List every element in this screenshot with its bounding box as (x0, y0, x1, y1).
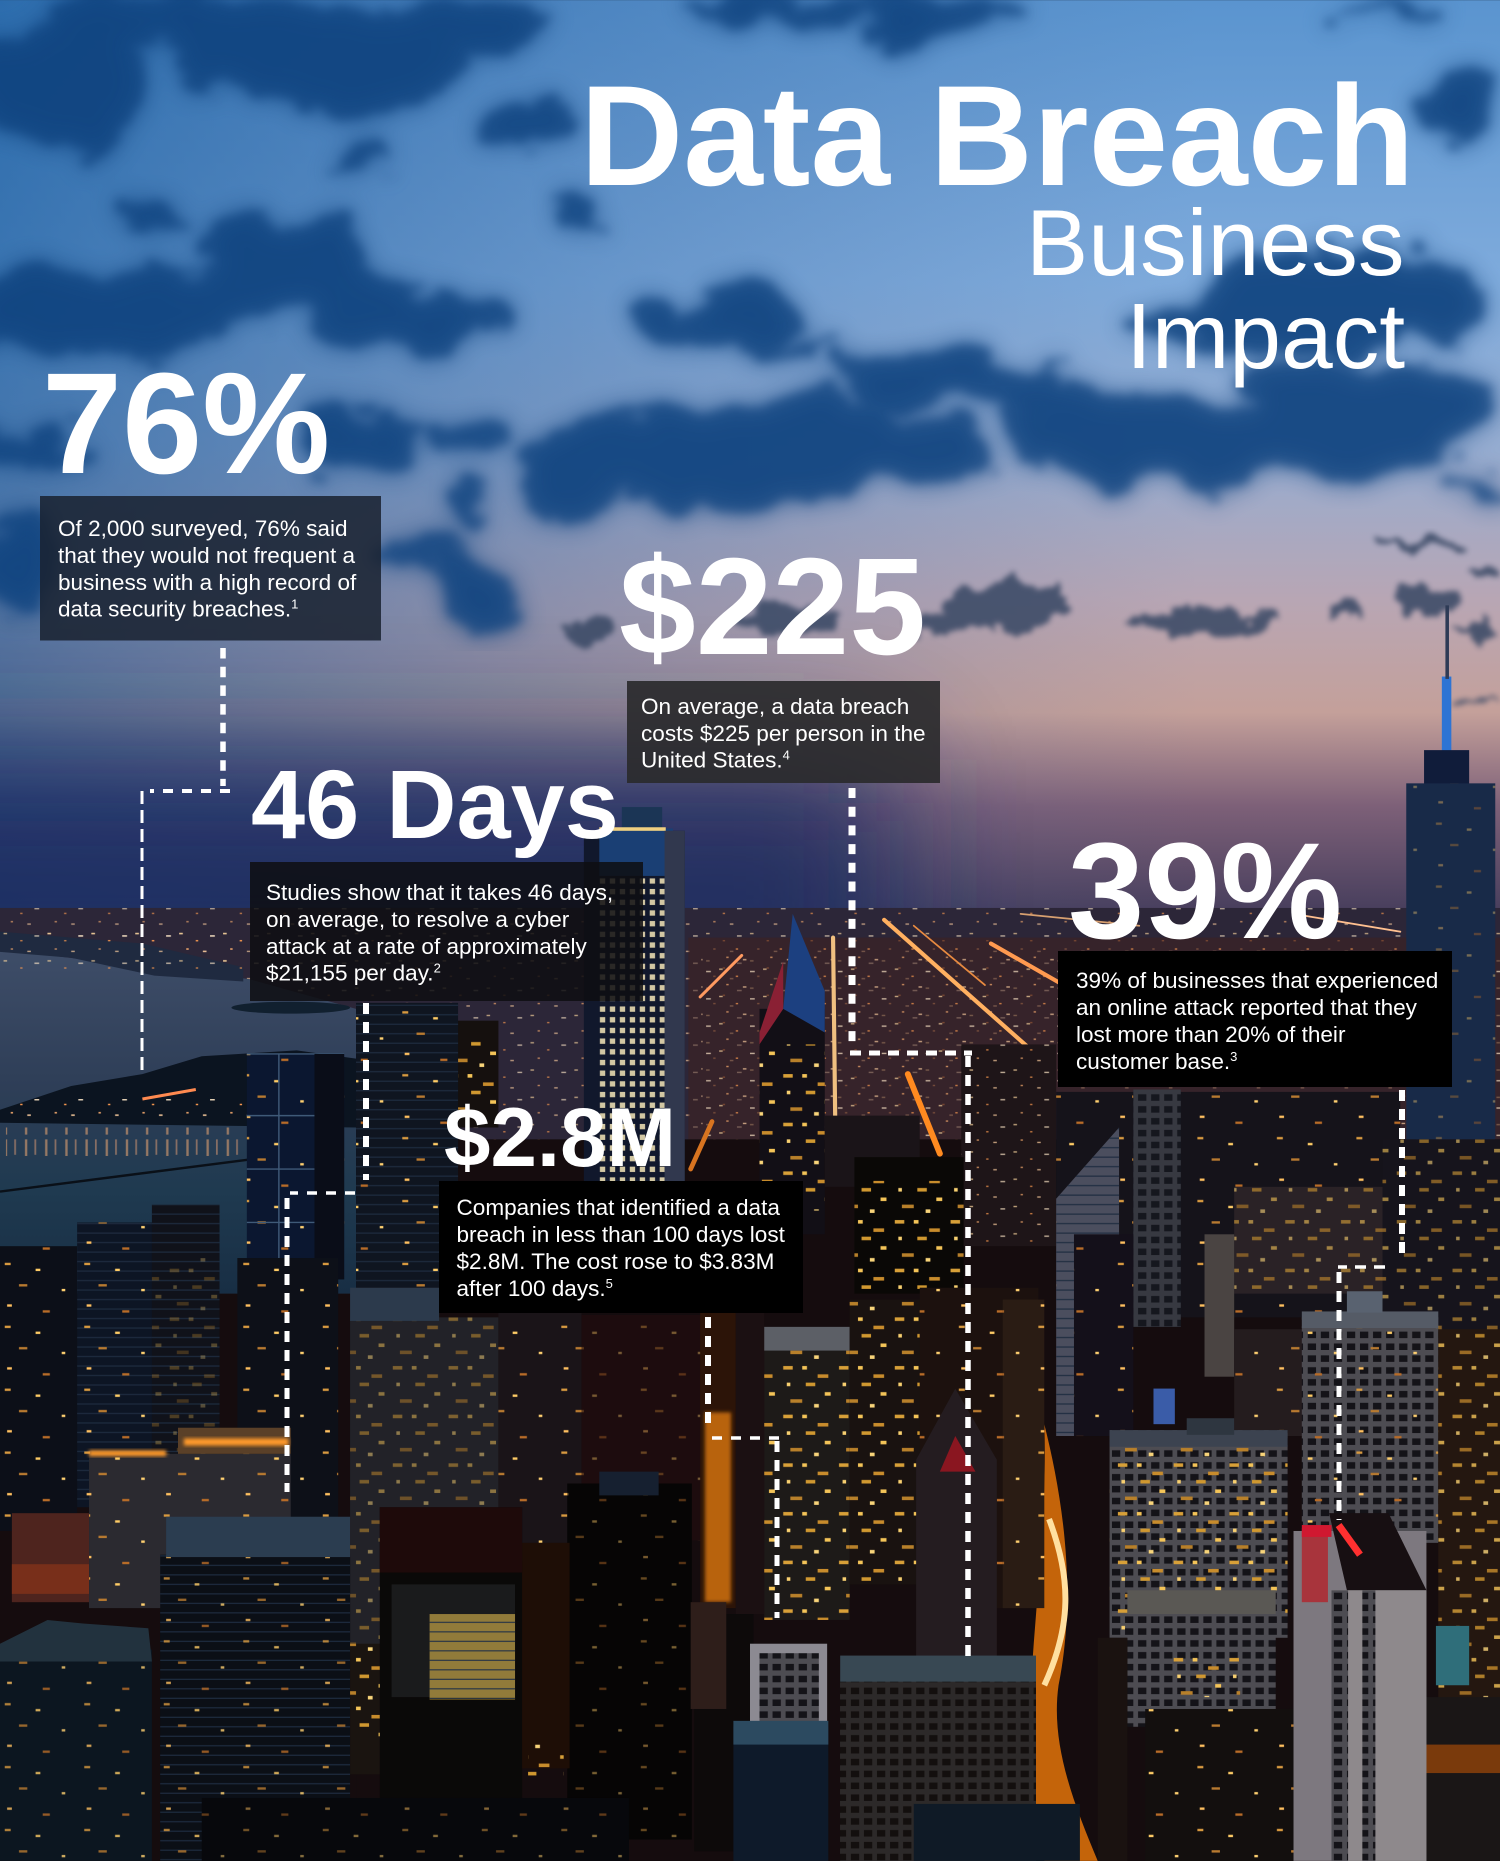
stat: $225 (619, 530, 940, 783)
text: $225 description: United States. (641, 748, 783, 772)
stat: 46 Days (250, 750, 643, 1001)
text: 46 Days description: Studies show that it takes 46 days, (266, 880, 613, 905)
text: 39% description: an online attack reported that they (1076, 995, 1418, 1020)
building: square office below (1127, 1590, 1276, 1727)
building: windowed office (1110, 1418, 1288, 1638)
building: red and blue crown tower (759, 914, 825, 1234)
text: 76% description: data security breaches. (58, 596, 291, 622)
text: 76% description: Of 2,000 surveyed, 76% said (58, 516, 348, 541)
building: left blue tower (247, 1054, 344, 1279)
lower-left buildings (0, 1205, 338, 1608)
connector: $2.8M dashed line (708, 1317, 780, 1618)
text: $225 description: costs $225 per person in the (641, 721, 926, 746)
number: 39%: 39% (1068, 815, 1342, 968)
text: 46 Days description: attack at a rate of approximately (266, 934, 588, 959)
text: $225 description: On average, a data breach (641, 694, 909, 719)
lake water (0, 932, 356, 1294)
text: 46 Days description: 2 (434, 960, 441, 976)
low clouds at sunset (566, 537, 1500, 704)
panel: 46 Days description (250, 862, 643, 1001)
text: $2.8M description: 5 (606, 1276, 613, 1291)
building: pale tower with red sign (1294, 1513, 1426, 1861)
panel: 39% description (1058, 951, 1452, 1087)
text: 76% description: business with a high record of (58, 570, 357, 595)
horizon city lights (0, 908, 1500, 1148)
text: 39% description: customer base. (1076, 1049, 1230, 1074)
number: $225: $225 (619, 530, 926, 684)
stat: 39% (1058, 815, 1452, 1087)
text: 39% description: 3 (1230, 1049, 1237, 1064)
connector: 76% dashed line (142, 648, 230, 1076)
text: $2.8M description: Companies that identified a data (456, 1195, 780, 1220)
text: 76% description: that they would not frequent a (58, 543, 356, 568)
building: right upper complex (1056, 1092, 1400, 1317)
text: $2.8M description: $2.8M. The cost rose to $3.83M (456, 1249, 774, 1274)
connector: $225 dashed line (850, 788, 972, 1662)
radiating street lights (691, 914, 1400, 1169)
text: $2.8M description: after 100 days. (456, 1276, 606, 1301)
text: 46 Days description: on average, to resolve a cyber (266, 907, 570, 932)
panel: 76% description (40, 496, 381, 640)
right side buildings (1003, 1234, 1500, 1861)
central lower buildings (350, 1157, 1038, 1662)
connector: 39% dashed line (1338, 1090, 1402, 1520)
text: 39% description: lost more than 20% of their (1076, 1022, 1346, 1047)
subtitle: Business: Business (1026, 191, 1405, 295)
title: Data Breach: Data Breach (580, 57, 1415, 216)
foreground buildings (0, 1472, 1080, 1861)
city ground (0, 1139, 1500, 1861)
building: glass spire tower (1383, 605, 1500, 1377)
text: 46 Days description: $21,155 per day. (266, 960, 434, 986)
text: $225 description: 4 (783, 748, 790, 762)
building: tall dark tower (356, 1003, 458, 1288)
number: 46 Days: 46 Days (251, 750, 619, 859)
stat: 76% (40, 343, 381, 640)
text: 39% description: 39% of businesses that experienced (1076, 968, 1438, 993)
number: $2.8M: $2.8M (444, 1090, 676, 1184)
mid-ground buildings (247, 605, 1500, 1436)
clouds (0, 0, 1500, 620)
text: 76% description: 1 (291, 596, 298, 612)
panel: $2.8M description (439, 1181, 803, 1313)
sky gradient (0, 0, 1500, 1021)
building: white-lit tower (584, 807, 685, 1187)
panel: $225 description (627, 681, 940, 783)
connector: 46 Days dashed line (287, 1003, 366, 1492)
building: triangular striped tower (1056, 1090, 1181, 1436)
subtitle: Impact: Impact (1126, 284, 1405, 388)
text: $2.8M description: breach in less than 100 days lost (456, 1222, 786, 1247)
title (580, 57, 1415, 388)
number: 76%: 76% (42, 343, 330, 504)
stat: $2.8M (439, 1090, 803, 1313)
